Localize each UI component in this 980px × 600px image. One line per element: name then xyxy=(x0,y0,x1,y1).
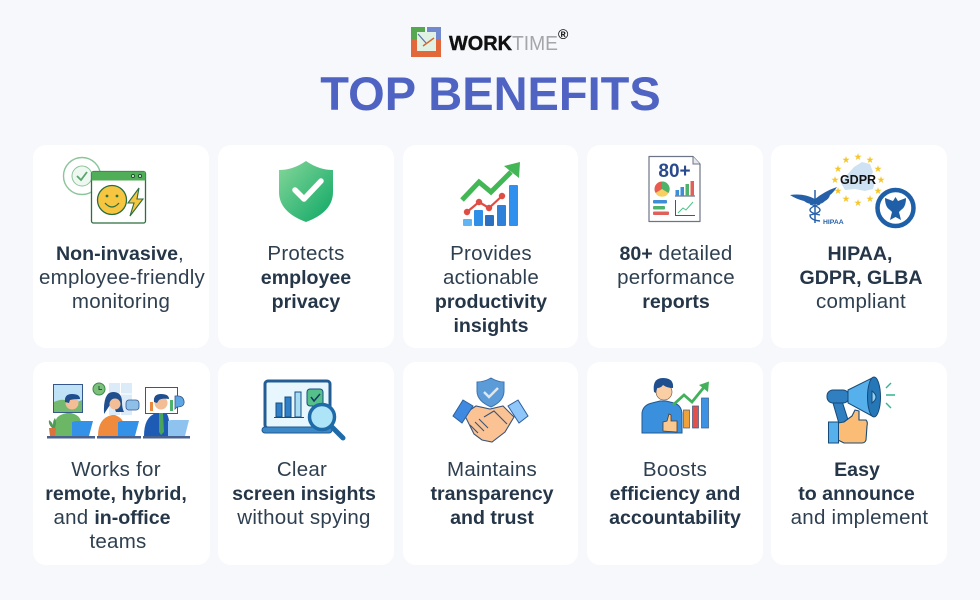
icon: green shield xyxy=(279,161,333,222)
icon: GDPR HIPAA GLBA seals: ★ xyxy=(854,198,862,209)
panel: easy to announce xyxy=(771,362,947,565)
text: employee-friendly xyxy=(39,266,206,289)
icon: stamp and smiley window xyxy=(64,158,146,223)
panel: compliance xyxy=(771,145,947,348)
text: performance xyxy=(617,266,735,289)
icon: GDPR HIPAA GLBA seals: ★ xyxy=(874,186,882,197)
text: Boosts xyxy=(643,458,707,481)
panel: non-invasive monitoring xyxy=(33,145,209,348)
icon: GDPR HIPAA GLBA seals: ★ xyxy=(854,152,862,163)
icon: GDPR HIPAA GLBA seals: ★ xyxy=(866,155,874,166)
text: 80+ detailed xyxy=(619,242,733,265)
icon: GDPR HIPAA GLBA seals: ★ xyxy=(831,175,839,186)
icon: GDPR HIPAA GLBA seals: ★ xyxy=(877,175,885,186)
panel: performance reports xyxy=(587,145,763,348)
icon: GDPR HIPAA GLBA seals: ★ xyxy=(842,194,850,205)
panel: clear screen insights xyxy=(218,362,394,565)
title: TOP BENEFITS xyxy=(320,67,661,120)
icon: GDPR HIPAA GLBA seals: HIPAA xyxy=(823,219,844,226)
text: and implement xyxy=(791,506,928,529)
panel: transparency and trust xyxy=(403,362,578,565)
text: actionable xyxy=(443,266,539,289)
icon: man with thumbs up and chart xyxy=(642,378,709,433)
icon: GDPR HIPAA GLBA seals: ★ xyxy=(834,164,842,175)
text: without spying xyxy=(236,506,371,529)
icon: GDPR HIPAA GLBA seals: ★ xyxy=(842,155,850,166)
logo: WorkTime: ® xyxy=(558,26,569,42)
text: screen insights xyxy=(232,483,376,505)
panel: productivity insights xyxy=(403,145,578,348)
logo: WorkTime: TIME xyxy=(512,33,558,55)
text: remote, hybrid, xyxy=(45,483,187,505)
icon: three workers xyxy=(47,383,190,438)
icon: GDPR HIPAA GLBA seals: ★ xyxy=(866,194,874,205)
icon: growth chart xyxy=(462,162,520,226)
text: Easy xyxy=(834,459,880,481)
text: GDPR, GLBA xyxy=(799,267,923,289)
text: efficiency and xyxy=(610,483,740,505)
text: to announce xyxy=(798,483,915,505)
icon: report page: 80+ xyxy=(658,161,691,182)
text: compliant xyxy=(816,290,906,313)
icon: handshake with shield xyxy=(453,378,528,442)
text: Protects xyxy=(267,242,345,265)
text: productivity xyxy=(435,291,547,313)
text: monitoring xyxy=(72,290,170,313)
icon: megaphone and thumb xyxy=(827,377,895,443)
text: teams xyxy=(89,530,147,553)
text: Provides xyxy=(450,242,532,265)
text: privacy xyxy=(272,291,340,313)
icon: GDPR HIPAA GLBA seals: GDPR xyxy=(840,173,876,187)
icon: GDPR HIPAA GLBA seals xyxy=(790,152,914,226)
text: , xyxy=(178,242,184,265)
panel: employee privacy xyxy=(218,145,394,348)
panel: efficiency and accountability xyxy=(587,362,763,565)
icon: report page xyxy=(649,156,700,222)
logo: WorkTime xyxy=(411,26,569,57)
text: HIPAA, xyxy=(828,243,892,265)
icon: GDPR HIPAA GLBA seals: ★ xyxy=(834,186,842,197)
text: and trust xyxy=(450,507,534,529)
icon: GDPR HIPAA GLBA seals: ★ xyxy=(874,164,882,175)
text: employee xyxy=(261,267,351,289)
logo: WorkTime: WORK xyxy=(449,33,513,55)
text: insights xyxy=(453,315,529,337)
text: Clear xyxy=(277,458,327,481)
text: reports xyxy=(642,291,710,313)
text: accountability xyxy=(609,507,741,529)
panel: remote, hybrid, in-office xyxy=(33,362,210,565)
icon: laptop with magnifier xyxy=(262,381,343,438)
text: Maintains xyxy=(447,458,537,481)
text: Works for xyxy=(71,458,161,481)
text: Non-invasive xyxy=(56,243,178,265)
text: transparency xyxy=(430,483,554,505)
text: and in-office xyxy=(53,506,171,529)
